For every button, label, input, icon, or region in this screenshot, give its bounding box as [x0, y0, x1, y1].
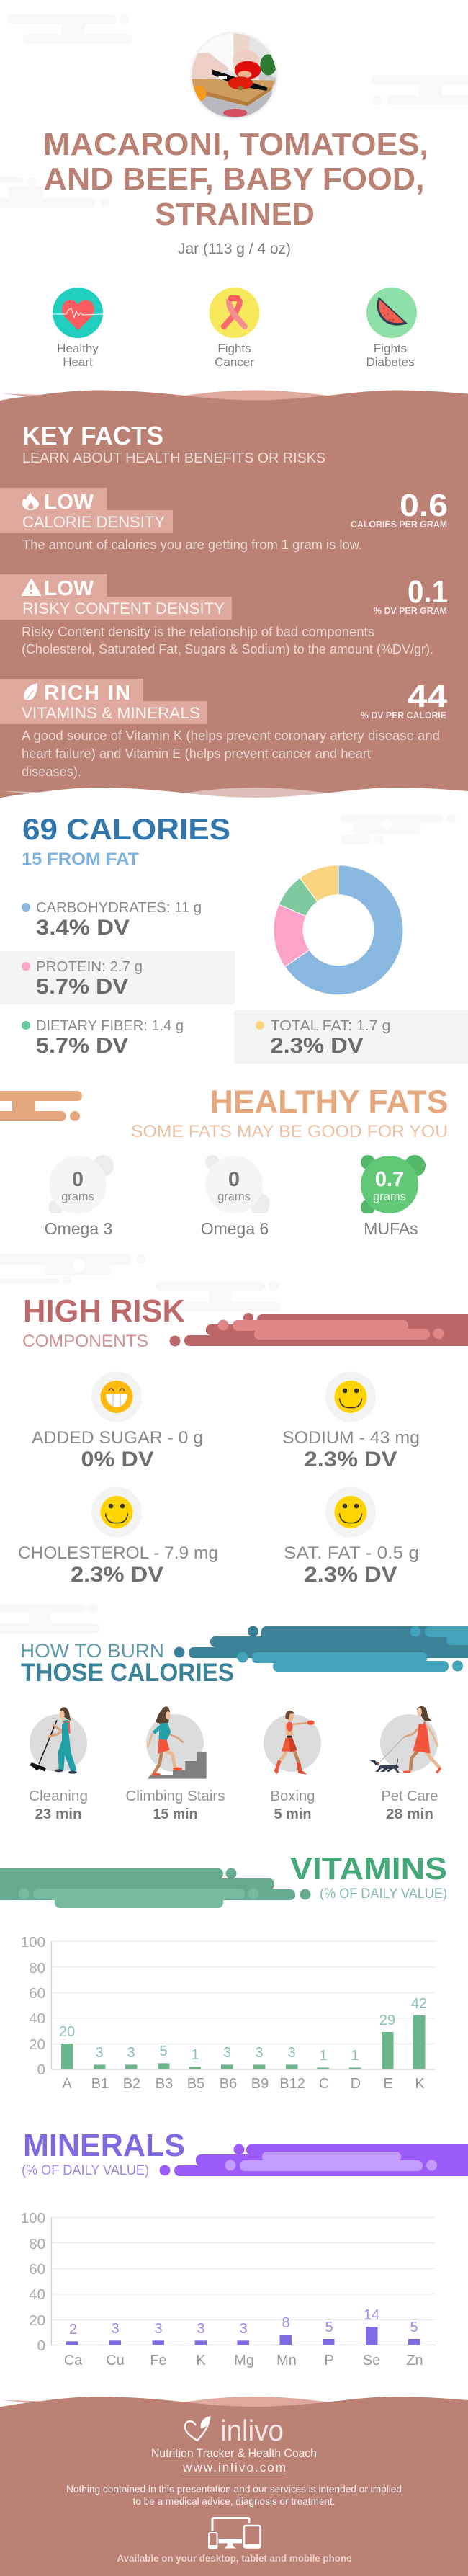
- item: added sugar: [32, 1372, 203, 1471]
- orange cloud: [0, 1091, 82, 1121]
- omega 6: Omega 6: [201, 1219, 269, 1238]
- gray row backgrounds: [0, 951, 468, 1064]
- bar chart: vitamins: K: [415, 2076, 425, 2092]
- serving size: Jar (113 g / 4 oz): [178, 241, 291, 257]
- omega 3: 0: [72, 1168, 84, 1191]
- bar chart: vitamins: 40: [29, 2010, 45, 2027]
- bar chart: vitamins: B1: [91, 2076, 109, 2092]
- item: sodium: SODIUM - 43 mg: [282, 1428, 420, 1448]
- item: saturated fat: SAT. FAT - 0.5 g: [284, 1543, 419, 1563]
- bar chart: vitamins: 5: [159, 2044, 168, 2059]
- bar chart: vitamins: B5: [187, 2076, 204, 2092]
- mufas: MUFAs: [364, 1219, 418, 1238]
- legend: total fat: 2.3% DV: [271, 1034, 363, 1058]
- fact: low risky content density: 0.1: [408, 574, 448, 610]
- benefit: healthy heart: [53, 288, 103, 369]
- legend: dietary fiber: [22, 1017, 184, 1058]
- bottom wave of key facts: [0, 788, 468, 804]
- mufas: 0.7: [375, 1168, 404, 1191]
- bar chart: vitamins: 42: [411, 1996, 427, 2012]
- fact: rich in vitamins and minerals: 44: [408, 679, 448, 714]
- panel: minerals: [21, 2129, 468, 2368]
- panel: healthy fats: [0, 1084, 448, 1238]
- disclaimer: Nothing contained in this presentation and our services is intended or implied: [66, 2483, 402, 2495]
- item: saturated fat: [284, 1487, 419, 1587]
- bar chart: vitamins: 1: [191, 2047, 199, 2063]
- activity: boxing: Boxing: [271, 1788, 315, 1804]
- item: cholesterol: CHOLESTEROL - 7.9 mg: [18, 1543, 218, 1563]
- fact: low risky content density: [0, 574, 448, 656]
- fact: low risky content density: RISKY CONTENT DENSITY: [22, 600, 225, 618]
- donut chart: [274, 865, 403, 995]
- illustration: woman walking a dog: [369, 1706, 441, 1773]
- subheading: SOME FATS MAY BE GOOD FOR YOU: [131, 1122, 448, 1141]
- fact: low calorie density: The amount of calories you are getting from 1 gram is low.: [22, 538, 362, 552]
- fact: rich in vitamins and minerals: % DV PER CALORIE: [361, 710, 446, 721]
- item: cholesterol: 2.3% DV: [71, 1563, 163, 1587]
- bar chart: minerals: Cu: [106, 2353, 125, 2368]
- benefit: fights diabetes: Fights: [374, 342, 407, 355]
- bar chart: minerals: 5: [410, 2319, 418, 2335]
- bar chart: minerals: 3: [197, 2321, 205, 2337]
- activity: boxing: 5 min: [274, 1806, 311, 1822]
- item: saturated fat: 2.3% DV: [304, 1563, 397, 1587]
- red cloud: [170, 1313, 468, 1346]
- icon: smiling face: [325, 1372, 376, 1422]
- activity: pet care: [369, 1706, 441, 1822]
- panel: key facts: [0, 391, 468, 804]
- bar chart: minerals: 2: [69, 2322, 77, 2337]
- green cloud: [0, 1868, 311, 1908]
- bar chart: vitamins: 1: [351, 2048, 359, 2064]
- background cloud: burn section: [0, 1603, 100, 1634]
- activity: pet care: Pet Care: [382, 1788, 438, 1804]
- hero photo: cutting a red pepper: [190, 32, 278, 120]
- logo: inlivo: [185, 2414, 284, 2447]
- bar chart: vitamins: E: [383, 2076, 393, 2092]
- bar chart: vitamins: 1: [319, 2048, 328, 2064]
- fact: low calorie density: CALORIES PER GRAM: [351, 519, 447, 530]
- disclaimer: to be a medical advice, diagnosis or treatment.: [132, 2495, 336, 2507]
- disclaimer: [66, 2483, 402, 2507]
- panel: footer: [0, 2397, 468, 2576]
- omega 6: grams: [217, 1190, 251, 1203]
- legend: carbohydrates: 3.4% DV: [36, 916, 130, 940]
- bar chart: minerals: [21, 2210, 436, 2368]
- icon: heart: [53, 288, 103, 338]
- bar chart: vitamins: 60: [29, 1985, 45, 2002]
- panel: how to burn those calories: [20, 1626, 468, 1822]
- activity: cleaning: [29, 1707, 88, 1822]
- bar chart: vitamins: 80: [29, 1960, 45, 1976]
- fact: low risky content density: (Cholesterol, Saturated Fat, Sugars & Sodium) to the amount (%DV/gr).: [22, 642, 433, 656]
- legend: protein: PROTEIN: 2.7 g: [36, 958, 143, 975]
- legend: protein: 5.7% DV: [36, 975, 128, 999]
- fact: low risky content density: LOW: [44, 577, 94, 600]
- mufas: [361, 1155, 426, 1238]
- fact: low calorie density: LOW: [44, 491, 94, 514]
- item: sodium: [282, 1372, 420, 1471]
- activity: climbing stairs: Climbing Stairs: [125, 1788, 225, 1804]
- benefit: fights diabetes: Diabetes: [366, 355, 415, 369]
- fact: low calorie density: 0.6: [400, 488, 448, 523]
- bar chart: minerals: 8: [282, 2315, 290, 2331]
- activity: cleaning: 23 min: [35, 1806, 82, 1822]
- panel: calories: [0, 812, 468, 1064]
- bar chart: minerals: Ca: [64, 2353, 83, 2368]
- fact: low risky content density: % DV PER GRAM: [374, 605, 447, 616]
- benefit: fights diabetes: [366, 288, 417, 369]
- bar chart: minerals: Mn: [276, 2353, 297, 2368]
- legend: total fat: [256, 1017, 390, 1058]
- bar chart: minerals: 5: [325, 2319, 333, 2335]
- activity: climbing stairs: 15 min: [153, 1806, 197, 1822]
- omega 6: 0: [228, 1168, 240, 1191]
- item: added sugar: ADDED SUGAR - 0 g: [32, 1428, 203, 1448]
- bar chart: minerals: 0: [37, 2337, 45, 2354]
- panel: high risk components: [18, 1294, 468, 1587]
- bar chart: vitamins: A: [62, 2076, 72, 2092]
- logo: inlivo: inlivo: [220, 2414, 284, 2447]
- bar chart: minerals: 40: [29, 2286, 45, 2303]
- title: STRAINED: [155, 197, 315, 232]
- bar chart: minerals: 14: [364, 2307, 379, 2323]
- bar chart: minerals: 60: [29, 2261, 45, 2278]
- bar chart: minerals: P: [324, 2353, 334, 2368]
- fact: rich in vitamins and minerals: [0, 679, 448, 779]
- item: sodium: 2.3% DV: [304, 1448, 397, 1471]
- panel: vitamins: [0, 1852, 447, 2092]
- icon: grinning face: [91, 1372, 142, 1422]
- title: [43, 127, 428, 232]
- bar chart: vitamins: B2: [123, 2076, 140, 2092]
- bar chart: minerals: 3: [154, 2321, 163, 2337]
- omega 3: [45, 1155, 114, 1238]
- benefit: fights cancer: Fights: [217, 342, 251, 355]
- subheading: (% OF DAILY VALUE): [320, 1886, 447, 1902]
- bar chart: vitamins: 3: [255, 2045, 264, 2061]
- omega 3: grams: [61, 1190, 94, 1203]
- legend: dietary fiber: 5.7% DV: [36, 1034, 128, 1058]
- activity: boxing: [264, 1711, 321, 1822]
- activity: climbing stairs: [125, 1706, 225, 1822]
- bar chart: minerals: 80: [29, 2236, 45, 2252]
- bar chart: minerals: Zn: [406, 2353, 423, 2368]
- omega 3: Omega 3: [45, 1219, 112, 1238]
- bar chart: vitamins: 100: [21, 1934, 45, 1951]
- subheading: 15 FROM FAT: [22, 850, 139, 869]
- fact: rich in vitamins and minerals: VITAMINS & MINERALS: [22, 704, 200, 722]
- bar chart: minerals: Fe: [150, 2353, 167, 2368]
- icon: smiling face: [91, 1487, 142, 1538]
- activity: cleaning: Cleaning: [29, 1788, 88, 1804]
- bar chart: minerals: Mg: [234, 2353, 254, 2368]
- heading: 69 CALORIES: [22, 812, 230, 846]
- bar chart: vitamins: 3: [95, 2045, 104, 2061]
- title: MACARONI, TOMATOES,: [43, 127, 428, 162]
- item: added sugar: 0% DV: [81, 1448, 154, 1471]
- illustration: woman on stairs: [146, 1706, 207, 1779]
- bar chart: minerals: 20: [29, 2312, 45, 2329]
- legend: protein: [22, 958, 143, 999]
- icon: smiling face: [325, 1487, 376, 1538]
- legend: dietary fiber: DIETARY FIBER: 1.4 g: [36, 1017, 184, 1034]
- icon: flame: [22, 492, 39, 510]
- bar chart: minerals: K: [196, 2353, 206, 2368]
- bar chart: vitamins: 0: [37, 2062, 45, 2078]
- legend: total fat: TOTAL FAT: 1.7 g: [271, 1017, 390, 1034]
- bar chart: vitamins: B12: [279, 2076, 305, 2092]
- bar chart: minerals: 3: [239, 2321, 248, 2337]
- subheading: COMPONENTS: [22, 1332, 148, 1351]
- availability note: Available on your desktop, tablet and mobile phone: [117, 2553, 352, 2564]
- heading line 2: THOSE CALORIES: [21, 1659, 234, 1687]
- legend: carbohydrates: [22, 899, 202, 940]
- bar chart: vitamins: 20: [59, 2024, 75, 2040]
- background clouds: high risk: [0, 1254, 281, 1311]
- benefit: fights cancer: [209, 288, 259, 369]
- heading: MINERALS: [23, 2129, 185, 2163]
- illustration: boxer: [264, 1711, 321, 1775]
- bar chart: vitamins: 20: [29, 2036, 45, 2053]
- fact: rich in vitamins and minerals: RICH IN: [44, 682, 130, 705]
- benefit: healthy heart: Healthy: [57, 342, 99, 355]
- bar chart: minerals: Se: [363, 2353, 380, 2368]
- item: cholesterol: [18, 1487, 218, 1587]
- bar chart: vitamins: B3: [156, 2076, 173, 2092]
- legend: carbohydrates: CARBOHYDRATES: 11 g: [36, 899, 202, 916]
- icon: devices: [209, 2518, 261, 2549]
- bar chart: vitamins: 3: [127, 2045, 135, 2061]
- heading line 1: HOW TO BURN: [20, 1640, 164, 1662]
- footer wave: [0, 2397, 468, 2576]
- bar chart: vitamins: D: [351, 2076, 361, 2092]
- fact: rich in vitamins and minerals: diseases).: [22, 765, 81, 779]
- bar chart: vitamins: 29: [379, 2013, 395, 2028]
- icon: leaf: [24, 683, 37, 700]
- light wave top: [0, 391, 328, 405]
- fact: low calorie density: [0, 488, 448, 552]
- fact: rich in vitamins and minerals: heart failure) and Vitamin E (helps prevent cancer and heart: [22, 746, 371, 761]
- bar chart: vitamins: B9: [251, 2076, 269, 2092]
- background clouds: header: [0, 14, 468, 208]
- title: AND BEEF, BABY FOOD,: [43, 161, 425, 197]
- teal cloud: [174, 1626, 468, 1672]
- tagline: Nutrition Tracker & Health Coach: [151, 2447, 317, 2460]
- mufas: grams: [373, 1190, 406, 1203]
- heading: HIGH RISK: [23, 1294, 186, 1329]
- background cloud: [341, 814, 456, 844]
- purple cloud: [160, 2144, 468, 2176]
- icon: warning triangle: [22, 579, 40, 595]
- icon: ribbon: [209, 288, 259, 338]
- heading: VITAMINS: [290, 1852, 447, 1886]
- bar chart: vitamins: 3: [223, 2045, 231, 2061]
- benefit: fights cancer: Cancer: [215, 355, 254, 369]
- benefit: healthy heart: Heart: [63, 355, 93, 369]
- bar chart: vitamins: 3: [287, 2045, 296, 2061]
- fact: low calorie density: CALORIE DENSITY: [22, 513, 165, 531]
- bar chart: vitamins: B6: [220, 2076, 237, 2092]
- bar chart: vitamins: C: [319, 2076, 329, 2092]
- activity: pet care: 28 min: [386, 1806, 433, 1822]
- bar chart: vitamins: [21, 1934, 436, 2092]
- section heading: KEY FACTS: [22, 421, 163, 450]
- icon: watermelon: [366, 288, 417, 338]
- bar chart: minerals: 3: [111, 2321, 120, 2337]
- section subheading: LEARN ABOUT HEALTH BENEFITS OR RISKS: [22, 450, 325, 466]
- fact: low risky content density: Risky Content density is the relationship of bad components: [22, 625, 374, 639]
- omega 6: [201, 1155, 270, 1238]
- bar chart: minerals: 100: [21, 2210, 45, 2227]
- fact: rich in vitamins and minerals: A good source of Vitamin K (helps prevent coronary artery disease and: [22, 728, 440, 743]
- heading: HEALTHY FATS: [210, 1084, 448, 1120]
- subheading: (% OF DAILY VALUE): [22, 2163, 149, 2178]
- website link: www.inlivo.com: [182, 2461, 286, 2474]
- illustration: woman sweeping: [30, 1707, 87, 1774]
